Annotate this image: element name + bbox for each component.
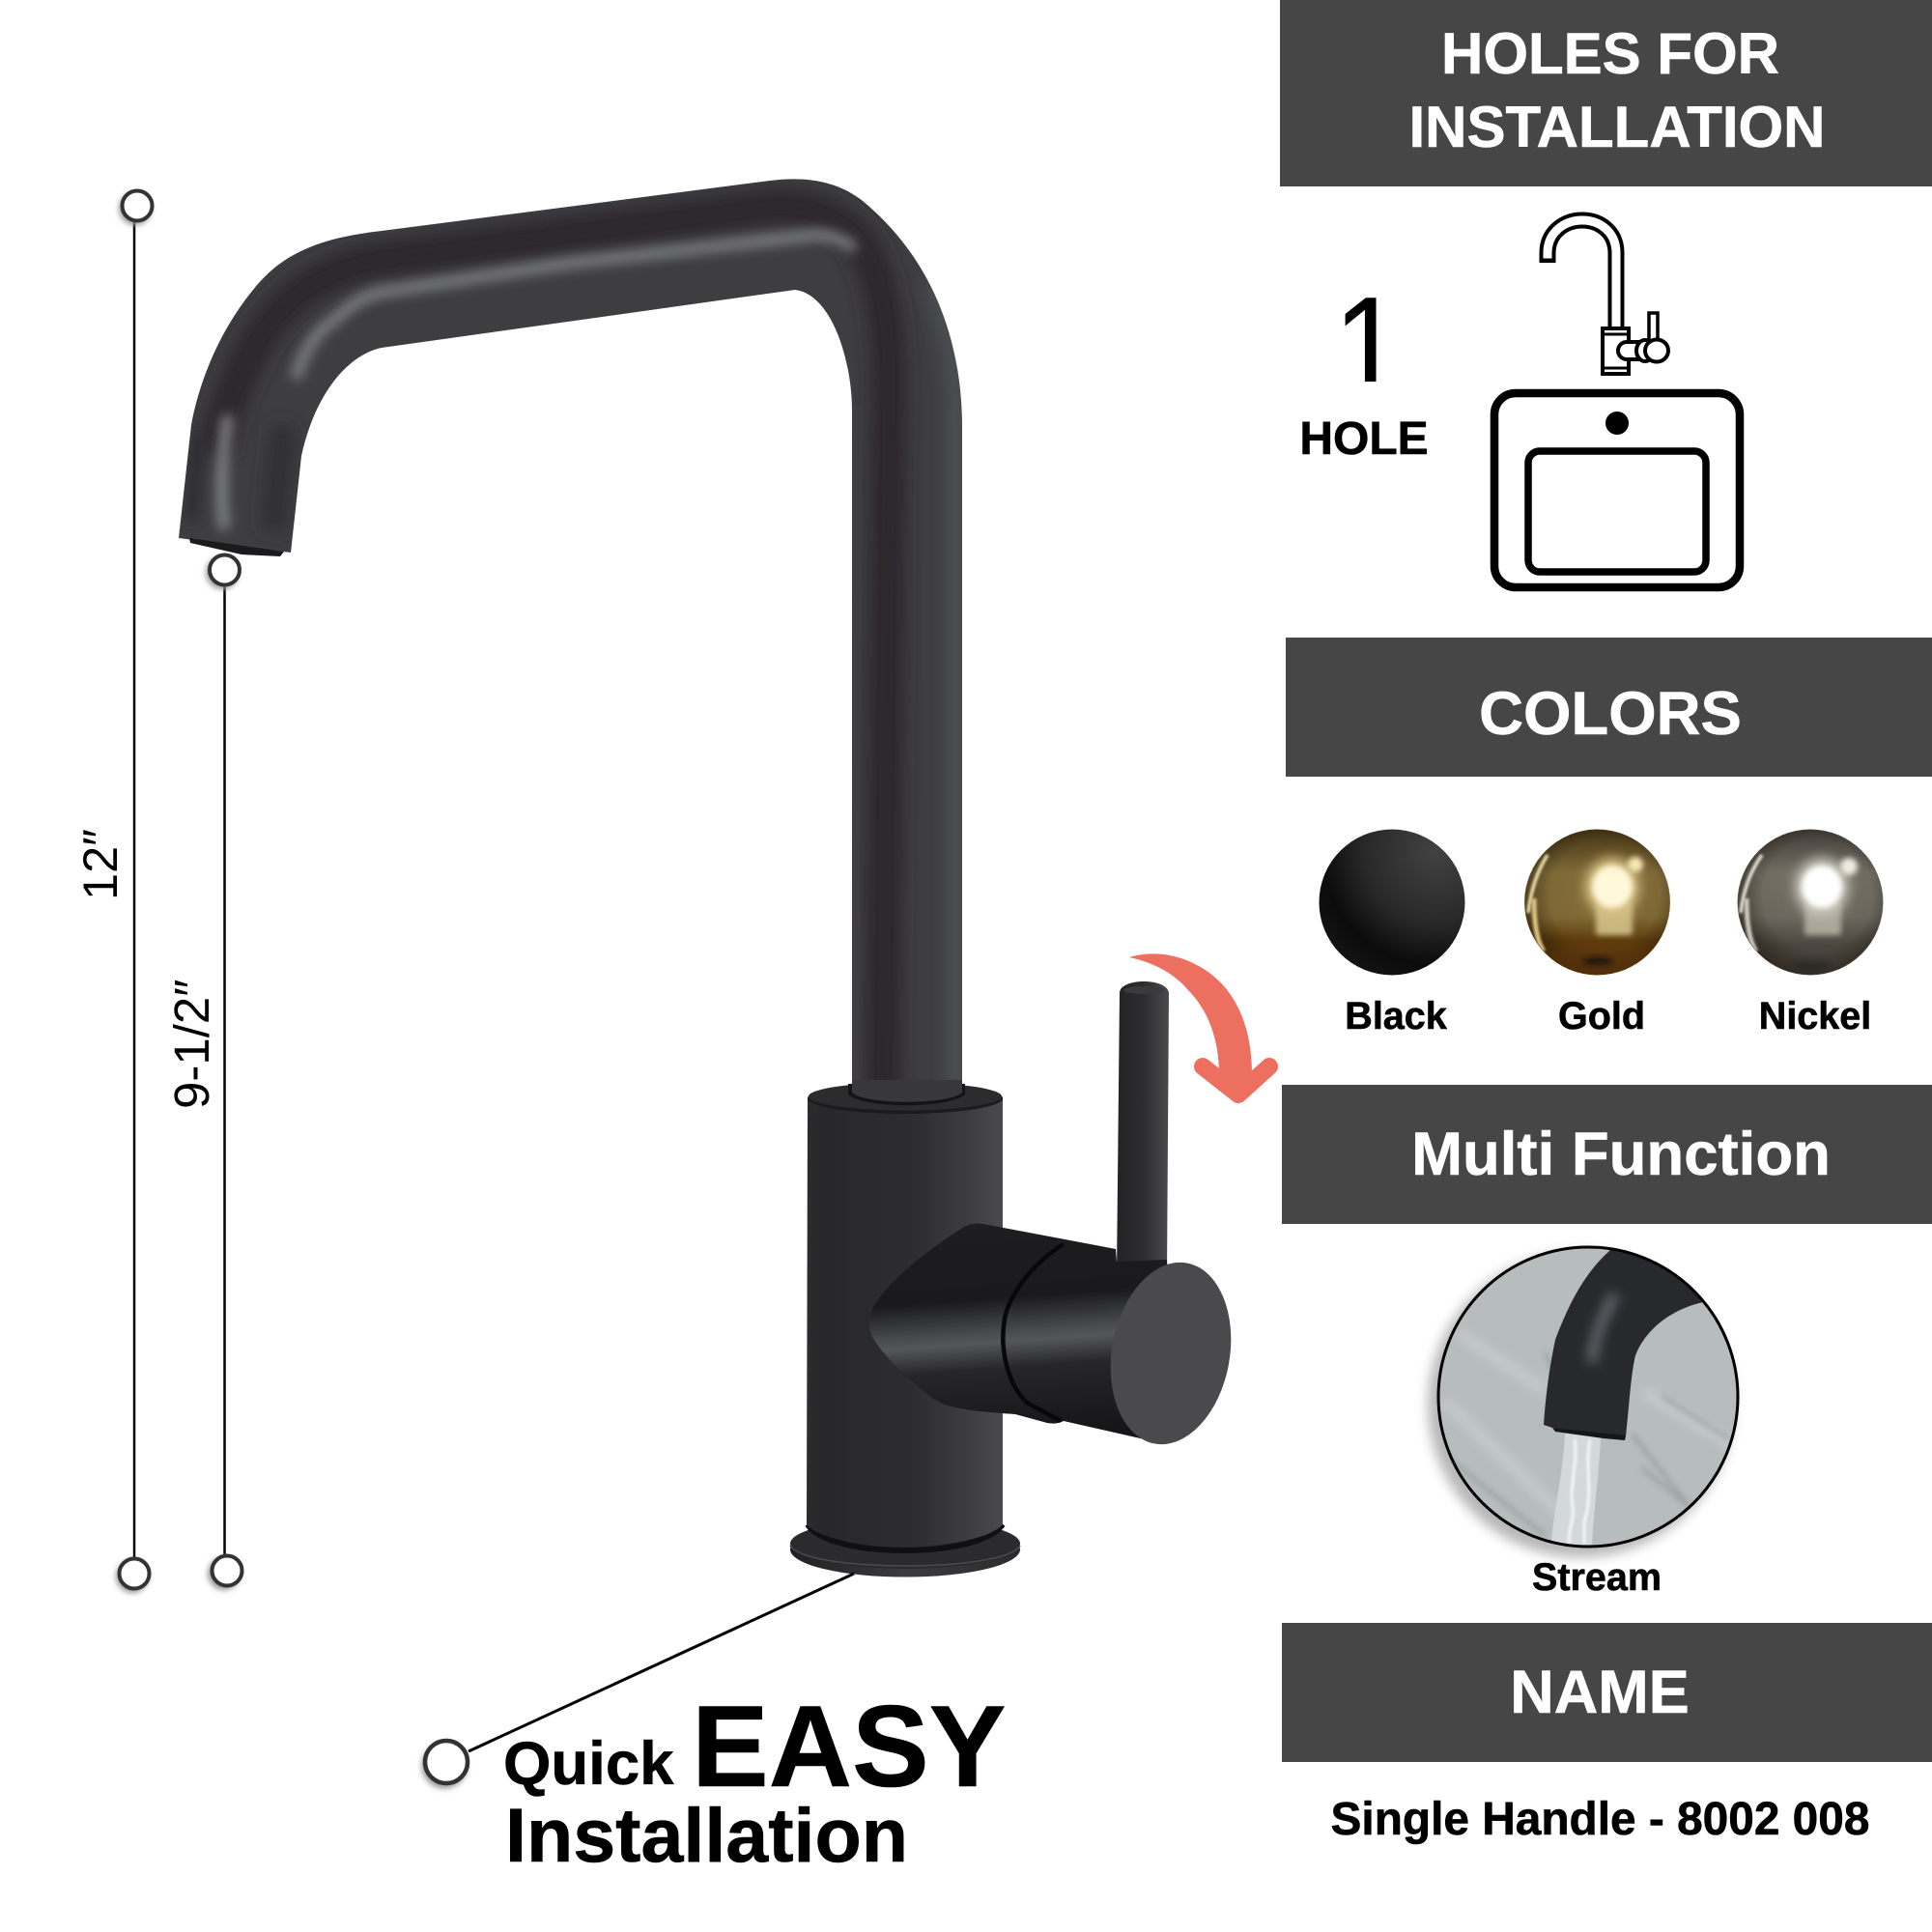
callout: quick easy installation: Installation	[505, 1792, 908, 1878]
marble veins	[1447, 1334, 1729, 1513]
panel: stream close-up	[1428, 1236, 1748, 1599]
handle barrel	[869, 1224, 1171, 1442]
callout: quick easy installation: Quick	[503, 1730, 674, 1798]
heading: multi function: Multi Function	[1411, 1121, 1831, 1188]
heading: colors: COLORS	[1479, 680, 1742, 748]
handle disc	[1096, 1253, 1245, 1454]
swatch: gold: Gold	[1558, 995, 1645, 1037]
swatch: black: Black	[1345, 995, 1447, 1037]
heading: holes for installation: HOLES FOR	[1441, 21, 1779, 86]
swatch: nickel	[1737, 829, 1884, 1037]
dimension: spout height 9-1/2 inch: 9-1/2″	[164, 980, 219, 1109]
arrow: lever direction	[1129, 953, 1269, 1094]
swatch: nickel: Nickel	[1759, 995, 1871, 1037]
swatch: black	[1320, 829, 1464, 1037]
text: 1 hole: 1	[1333, 267, 1404, 428]
text: 1 hole	[1302, 298, 1428, 455]
heading: holes for installation: INSTALLATION	[1408, 95, 1826, 159]
heading: name	[1282, 1623, 1932, 1762]
handle lever	[1117, 981, 1169, 1275]
spout nozzle	[189, 538, 284, 556]
text: 1 hole: HOLE	[1299, 413, 1429, 465]
dimension: spout height 9-1/2 inch	[164, 554, 242, 1590]
faucet body cylinder	[807, 1097, 1003, 1546]
swatch: gold	[1524, 829, 1670, 1037]
water stream	[1551, 1433, 1601, 1546]
heading: multi function	[1282, 1085, 1932, 1224]
heading: name: NAME	[1510, 1659, 1690, 1726]
dimension: overall height 12 inch	[72, 191, 153, 1593]
panel: stream close-up: Stream	[1532, 1556, 1662, 1599]
dimension: overall height 12 inch: 12″	[72, 829, 128, 900]
handle ring gap	[1003, 1244, 1064, 1421]
icon: sink with one hole	[1494, 393, 1740, 587]
faucet spout and riser	[164, 164, 976, 1111]
faucet product image	[164, 164, 1245, 1577]
heading: colors	[1286, 638, 1932, 777]
callout: quick easy installation	[421, 1574, 1006, 1878]
heading: holes for installation	[1280, 0, 1932, 186]
body top rim	[808, 1080, 1003, 1114]
callout: quick easy installation: EASY	[692, 1683, 1006, 1811]
icon: faucet line drawing	[1541, 220, 1668, 374]
text: product name: Single Handle - 8002 008	[1331, 1794, 1869, 1845]
spout close-up	[1544, 1250, 1702, 1436]
faucet base plate	[790, 1519, 1020, 1577]
